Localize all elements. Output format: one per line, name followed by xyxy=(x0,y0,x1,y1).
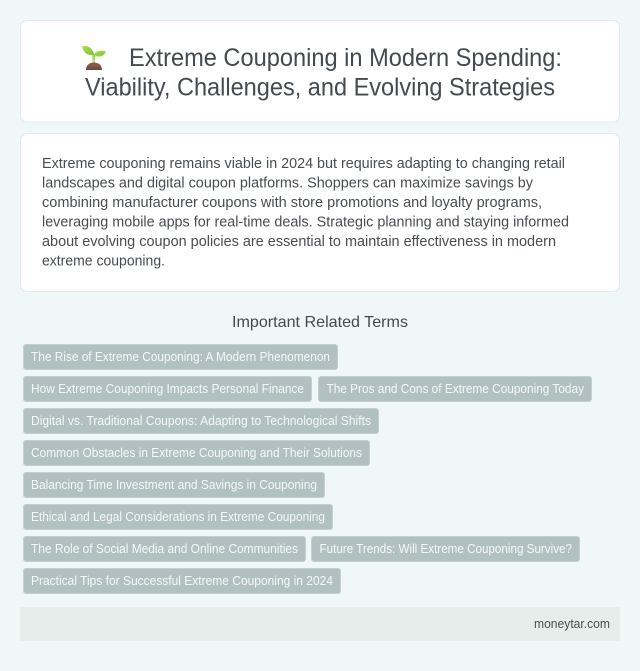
heading: important related terms: Important Related Terms xyxy=(232,314,408,331)
panel: title card xyxy=(20,20,620,122)
tag: The Rise of Extreme Couponing: A Modern Phenomenon xyxy=(31,350,330,364)
tag: How Extreme Couponing Impacts Personal Finance xyxy=(31,382,304,396)
tag xyxy=(24,536,306,562)
footer xyxy=(20,607,620,641)
text block: description xyxy=(42,156,569,270)
tag xyxy=(318,376,592,402)
tag: Digital vs. Traditional Coupons: Adapting to Technological Shifts xyxy=(31,414,371,428)
tag: Ethical and Legal Considerations in Extreme Couponing xyxy=(31,510,325,524)
footer: moneytar.com xyxy=(534,617,610,631)
text block: description: Extreme couponing remains viable in 2024 but requires adapting to changing retail xyxy=(42,156,565,172)
tag: Practical Tips for Successful Extreme Couponing in 2024 xyxy=(31,574,333,588)
tag xyxy=(312,536,580,562)
icon: seedling xyxy=(82,46,106,70)
text block: description: leveraging mobile apps for real-time deals. Strategic planning and staying informed xyxy=(42,214,569,230)
tag xyxy=(24,472,324,498)
tag: Balancing Time Investment and Savings in Couponing xyxy=(31,478,317,492)
tag: The Role of Social Media and Online Communities xyxy=(31,542,298,556)
tag xyxy=(24,568,340,594)
tag xyxy=(24,376,312,402)
title: Extreme Couponing in Modern Spending: xyxy=(129,44,562,72)
title xyxy=(85,44,562,102)
tag xyxy=(24,408,378,434)
panel: related term tags xyxy=(24,344,592,594)
tag xyxy=(24,344,338,370)
text block: description: extreme couponing. xyxy=(42,254,165,270)
tag xyxy=(24,440,370,466)
text block: description: landscapes and digital coupon platforms. Shoppers can maximize savings by xyxy=(42,176,534,192)
text block: description: about evolving coupon policies are essential to maintain effectiveness in modern xyxy=(42,234,556,250)
panel: description card xyxy=(20,134,620,292)
text block: description: combining manufacturer coupons with store promotions and loyalty programs, xyxy=(42,195,542,211)
tag xyxy=(24,504,332,530)
tag: Future Trends: Will Extreme Couponing Survive? xyxy=(320,542,572,556)
title: Viability, Challenges, and Evolving Strategies xyxy=(85,74,555,102)
tag: The Pros and Cons of Extreme Couponing Today xyxy=(326,382,585,396)
tag: Common Obstacles in Extreme Couponing and Their Solutions xyxy=(31,446,362,460)
